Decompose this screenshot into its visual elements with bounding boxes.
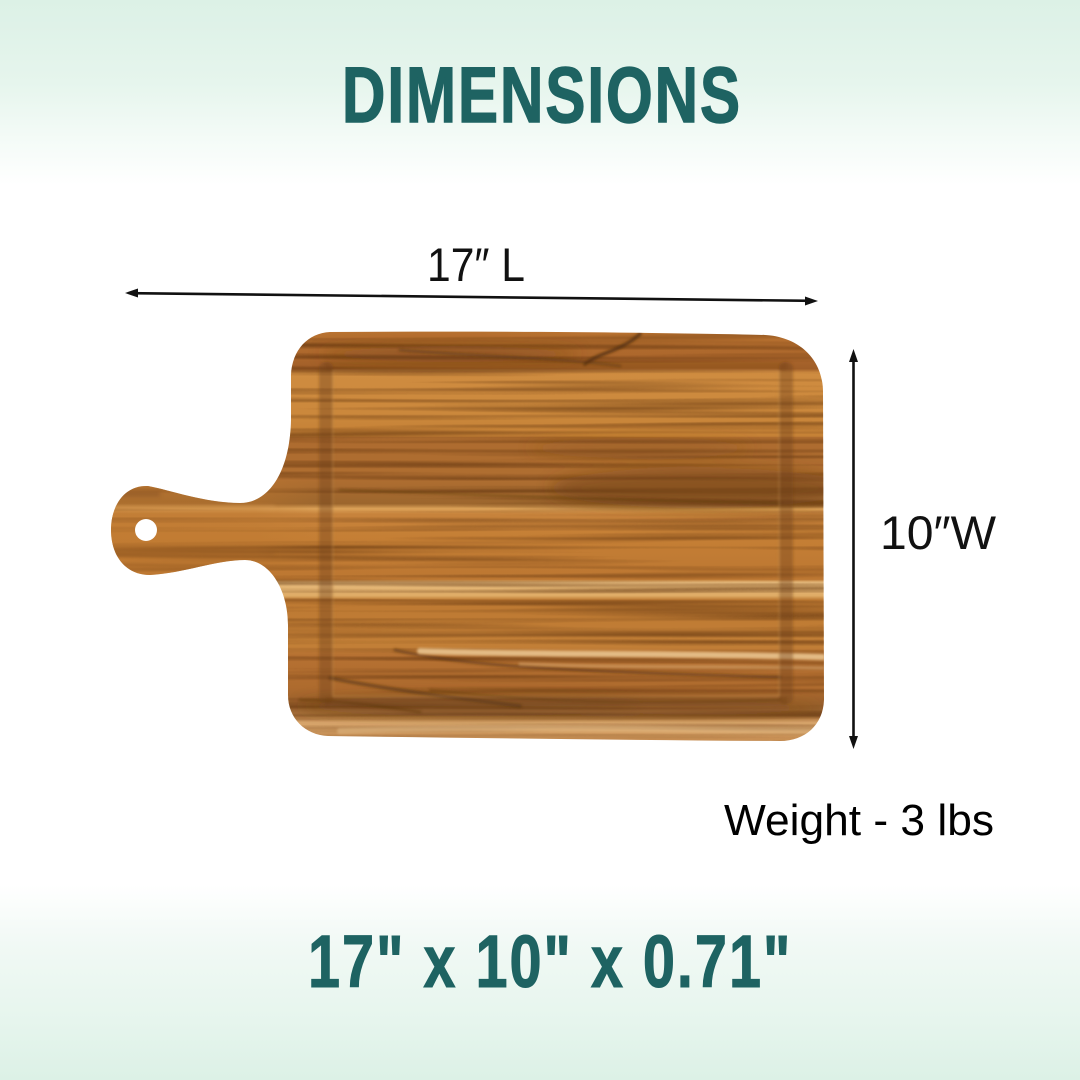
summary dimensions: 17" x 10" x 0.71" bbox=[308, 921, 792, 1004]
arrow: length dimension bbox=[125, 288, 818, 306]
hanging hole bbox=[135, 519, 157, 541]
illustration: teak cutting board with handle bbox=[100, 325, 850, 745]
dark streaks bbox=[300, 334, 780, 712]
label: width 10 inches: 10″W bbox=[880, 506, 997, 559]
label: length 17 inches: 17″ L bbox=[427, 238, 525, 291]
title: DIMENSIONS bbox=[342, 50, 742, 139]
handle tone bbox=[111, 480, 295, 580]
label: weight: Weight - 3 lbs bbox=[724, 796, 994, 845]
juice groove bbox=[319, 362, 793, 706]
pale streaks, lower right bbox=[340, 651, 823, 731]
dark figure in the wood, centre right bbox=[300, 346, 850, 716]
arrow: width dimension bbox=[849, 349, 858, 749]
